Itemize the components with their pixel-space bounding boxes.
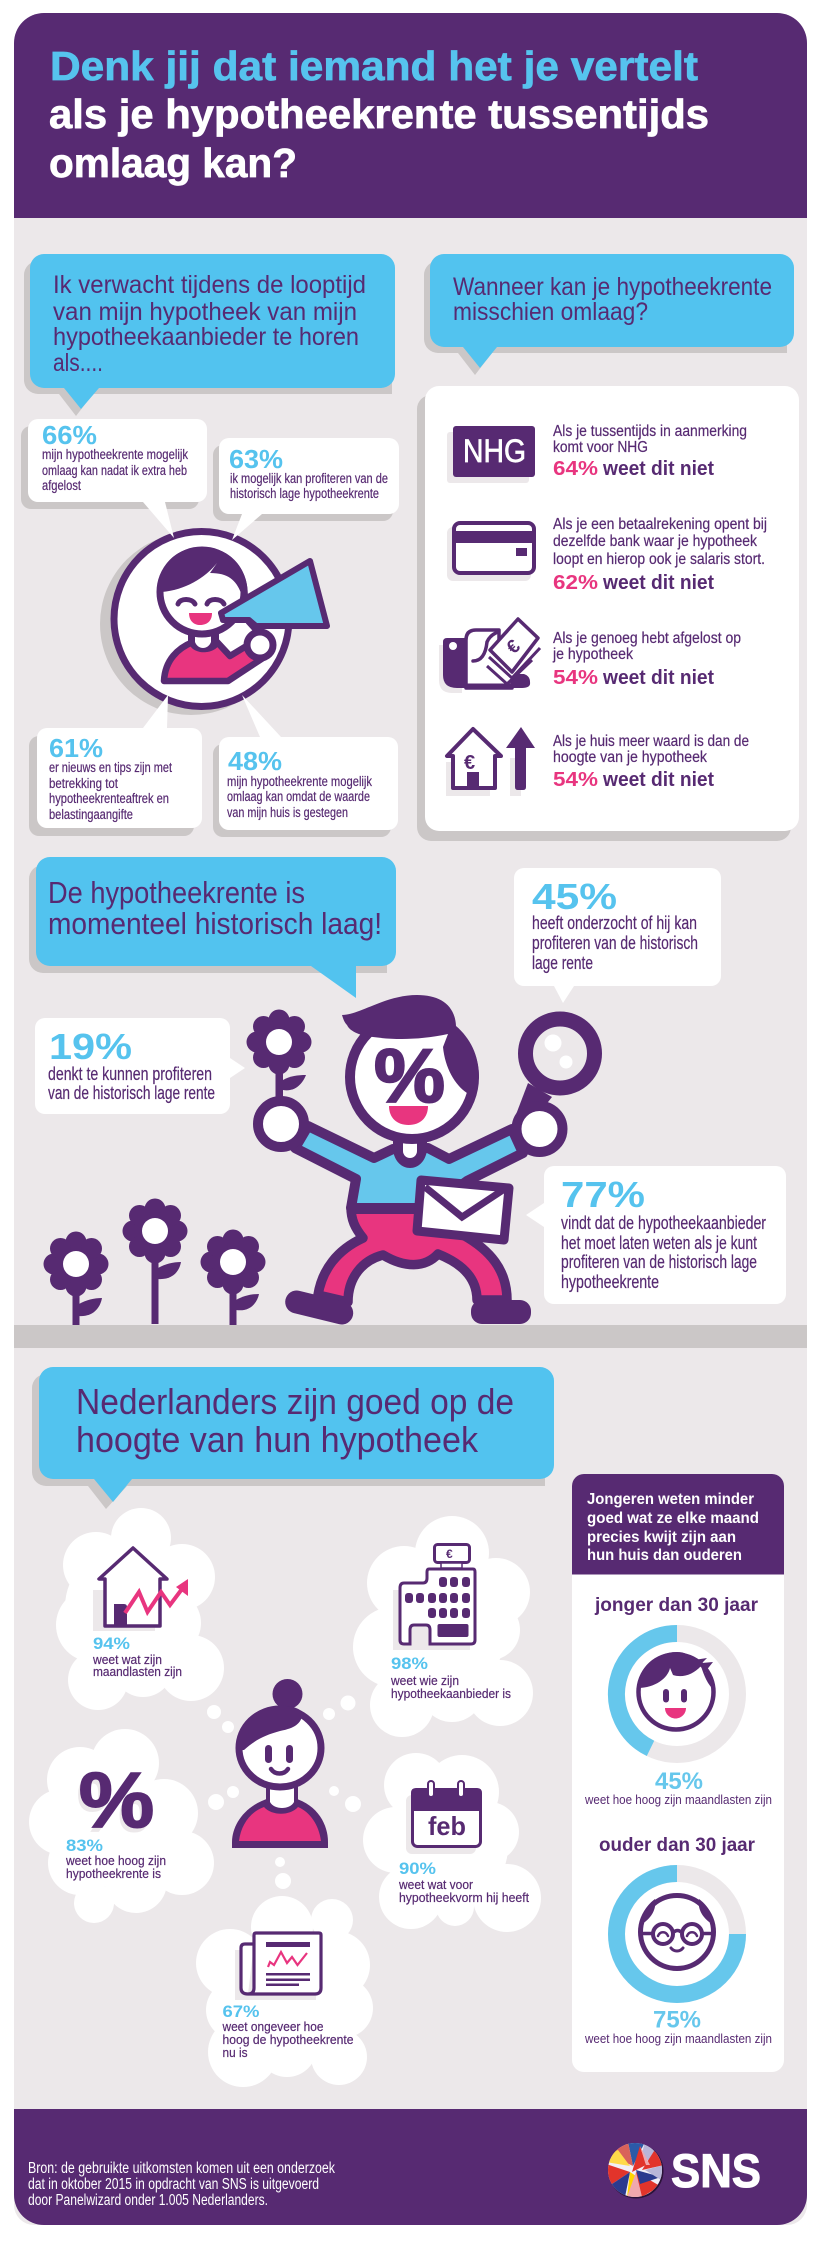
icon: percent: % — [79, 1756, 154, 1844]
callout: 66%: omlaag kan nadat ik extra heb — [42, 463, 187, 478]
eyes and mouth — [178, 600, 224, 604]
hands — [258, 1101, 304, 1147]
face — [265, 1745, 272, 1763]
item text: huis: Als je huis meer waard is dan de — [553, 733, 749, 750]
item text: betaalrekening: Als je een betaalrekening opent bij — [553, 516, 767, 533]
bubble text — [76, 1381, 514, 1460]
item text: afgelost: 54% — [553, 667, 598, 689]
callout: 77%: profiteren van de historisch lage — [561, 1252, 757, 1272]
item text: betaalrekening — [553, 516, 767, 594]
magnifier handle — [512, 1083, 552, 1125]
icon: young face — [638, 1652, 714, 1730]
source text: door Panelwizard onder 1.005 Nederlanders. — [28, 2192, 268, 2209]
mouth — [389, 1106, 428, 1125]
donut chart: 75% — [616, 1874, 738, 1994]
callout: 61%: er nieuws en tips zijn met — [49, 760, 172, 775]
panel heading: precies kwijt zijn aan — [587, 1529, 736, 1546]
speech bubble: wanneer — [424, 254, 794, 375]
cloud: 83% — [29, 1729, 214, 1923]
callout: 63% — [219, 438, 399, 540]
callout: 77% — [526, 1166, 786, 1304]
cloud: 67%: weet ongeveer hoe — [222, 2019, 324, 2034]
bubble text — [453, 273, 772, 326]
source text — [28, 2160, 335, 2209]
body — [164, 642, 266, 681]
cloud: 98%: hypotheekaanbieder is — [391, 1686, 511, 1701]
bubble text: momenteel historisch laag! — [48, 906, 382, 941]
callout: 66% — [28, 419, 207, 538]
callout: 19%: denkt te kunnen profiteren — [48, 1064, 212, 1084]
cloud: 67%: nu is — [222, 2045, 248, 2060]
title: omlaag kan? — [49, 140, 297, 186]
torso and arms — [295, 1126, 523, 1208]
item text: betaalrekening: loopt en hierop ook je salaris stort. — [553, 551, 765, 568]
stat: 45%: 45% — [655, 1768, 703, 1795]
callout: 77%: het moet laten weten als je kunt — [561, 1233, 757, 1253]
neck — [266, 1780, 298, 1811]
megaphone circle shadow — [100, 533, 282, 715]
source text: dat in oktober 2015 in opdracht van SNS is uitgevoerd — [28, 2176, 319, 2193]
callout: 48%: van mijn huis is gestegen — [227, 805, 348, 820]
icon: bank building — [393, 1544, 475, 1650]
head — [160, 550, 244, 634]
panel heading: hun huis dan ouderen — [587, 1547, 742, 1564]
callout: 48%: mijn hypotheekrente mogelijk — [227, 774, 372, 789]
percent face: % — [374, 1034, 445, 1119]
callout: 61%: belastingaangifte — [49, 807, 133, 822]
item text: afgelost: weet dit niet — [602, 667, 714, 689]
icon: calendar feb — [406, 1781, 482, 1854]
callout: 66%: 66% — [42, 420, 97, 450]
title — [49, 43, 709, 186]
icon: hand with money: € — [503, 636, 525, 659]
hand — [247, 632, 273, 658]
cloud: 94% — [56, 1508, 224, 1710]
bubble text: Ik verwacht tijdens de looptijd — [53, 271, 366, 299]
stat: 75%: weet hoe hoog zijn maandlasten zijn — [584, 2032, 772, 2046]
bun — [272, 1679, 302, 1709]
megaphone — [248, 622, 264, 633]
head — [239, 1709, 321, 1787]
body — [232, 1798, 328, 1848]
panel heading: Jongeren weten minder — [587, 1491, 754, 1508]
envelope — [417, 1180, 509, 1240]
callout: 45% — [514, 868, 721, 1003]
bubble text: Wanneer kan je hypotheekrente — [453, 273, 772, 301]
callout: 77%: vindt dat de hypotheekaanbieder — [561, 1213, 766, 1233]
item text: NHG: komt voor NHG — [553, 439, 648, 456]
callout: 61% — [37, 695, 202, 828]
item text: NHG: Als je tussentijds in aanmerking — [553, 423, 747, 440]
speech bubble: goed op de hoogte — [32, 1367, 554, 1509]
bubble text: De hypotheekrente is — [48, 875, 305, 910]
bubble text: Nederlanders zijn goed op de — [76, 1381, 514, 1422]
cloud: 67%: 67% — [222, 2002, 260, 2021]
item text: huis: 54% — [553, 769, 598, 791]
title: als je hypotheekrente tussentijds — [49, 91, 709, 137]
cloud: 94%: weet wat zijn — [92, 1652, 162, 1667]
feet — [297, 1302, 342, 1313]
callout: 61%: hypotheekrenteaftrek en — [49, 791, 169, 806]
icon: percent: % — [76, 1761, 151, 1849]
cloud: 98%: 98% — [391, 1654, 428, 1673]
callout: 45%: lage rente — [532, 953, 593, 973]
cloud: 67%: hoog de hypotheekrente — [222, 2032, 354, 2047]
icon: bank card — [447, 523, 534, 581]
bubble text — [48, 875, 382, 941]
flower held by character — [246, 1010, 312, 1100]
bubble text: misschien omlaag? — [453, 298, 648, 326]
callout: 77%: 77% — [561, 1174, 645, 1215]
bubble text: als.... — [53, 349, 103, 377]
title: Denk jij dat iemand het je vertelt — [50, 43, 698, 89]
character: thinking woman — [232, 1679, 328, 1848]
callout: 77%: hypotheekrente — [561, 1272, 659, 1292]
panel: wanneer omlaag — [417, 386, 799, 841]
callout: 48%: 48% — [228, 746, 282, 776]
icon: house with arrow: € — [464, 752, 475, 774]
logo: SNS — [605, 2140, 761, 2200]
panel heading — [587, 1491, 759, 1564]
stat: 75% — [584, 2006, 772, 2046]
cloud: 90%: 90% — [399, 1859, 436, 1878]
bubble text: van mijn hypotheek van mijn — [53, 298, 357, 326]
item text: afgelost — [552, 630, 741, 689]
cloud: 83%: weet hoe hoog zijn — [65, 1853, 166, 1868]
callout: 45%: heeft onderzocht of hij kan — [532, 913, 697, 933]
neck — [393, 1130, 427, 1168]
item text: huis: weet dit niet — [602, 769, 714, 791]
cloud: 98%: weet wie zijn — [390, 1673, 459, 1688]
icon: calendar feb: feb — [428, 1811, 466, 1841]
speech bubble: verwachting — [24, 254, 395, 416]
hair — [236, 1706, 303, 1750]
icon: newspaper — [235, 1933, 321, 2000]
item text: betaalrekening: dezelfde bank waar je hypotheek — [553, 533, 757, 550]
callout: 66%: afgelost — [42, 478, 81, 493]
icon: megaphone person — [114, 532, 327, 706]
donut chart: 45% — [616, 1634, 738, 1754]
panel heading: goed wat ze elke maand — [587, 1510, 759, 1527]
source text: Bron: de gebruikte uitkomsten komen uit een onderzoek — [28, 2160, 335, 2177]
callout: 48%: omlaag kan omdat de waarde — [227, 789, 370, 804]
icon: old face — [640, 1896, 714, 1968]
hair — [159, 547, 248, 596]
bubble text — [53, 271, 366, 377]
callout: 63%: historisch lage hypotheekrente — [230, 486, 379, 501]
thought dots — [207, 1696, 361, 1889]
stat: 45% — [584, 1768, 772, 1807]
callout: 45%: profiteren van de historisch — [532, 933, 698, 953]
speech bubble: historisch laag — [29, 857, 396, 998]
item text: betaalrekening: weet dit niet — [602, 572, 714, 594]
bubble text: hoogte van hun hypotheek — [76, 1419, 479, 1460]
cloud: 90% — [363, 1753, 541, 1932]
panel: jongeren — [572, 1474, 784, 2072]
item text: afgelost: je hypotheek — [552, 646, 633, 663]
item text: afgelost: Als je genoeg hebt afgelost op — [553, 630, 741, 647]
item text: huis — [553, 733, 749, 791]
cloud: 94%: 94% — [93, 1634, 130, 1653]
callout: 19%: 19% — [49, 1026, 132, 1067]
cloud: 98% — [353, 1516, 533, 1737]
item text: huis: hoogte van je hypotheek — [553, 749, 707, 766]
cloud: 94%: maandlasten zijn — [93, 1664, 182, 1679]
grey divider band — [14, 1325, 807, 1348]
callout: 63%: 63% — [229, 444, 283, 474]
callout: 48% — [219, 695, 398, 830]
icon: house with rising line — [93, 1548, 188, 1631]
belt — [347, 1203, 437, 1214]
subheading: jonger dan 30 jaar — [594, 1595, 759, 1616]
callout: 45%: 45% — [532, 876, 617, 917]
head — [350, 1015, 474, 1139]
flowers on ground — [44, 1198, 266, 1326]
icon: NHG — [447, 426, 535, 483]
hair — [342, 995, 479, 1093]
cloud: 83%: hypotheekrente is — [66, 1866, 161, 1881]
legs — [318, 1207, 507, 1302]
callout: 19% — [35, 1018, 245, 1114]
cloud: 90%: hypotheekvorm hij heeft — [399, 1890, 529, 1905]
icon: bank building: € — [446, 1547, 453, 1561]
callout: 63%: ik mogelijk kan profiteren van de — [230, 471, 388, 486]
cloud: 83%: 83% — [66, 1836, 103, 1855]
callout: 61%: betrekking tot — [49, 776, 118, 791]
callout: 66%: mijn hypotheekrente mogelijk — [42, 447, 188, 462]
magnifier — [526, 1019, 594, 1088]
footer band — [14, 2109, 807, 2225]
item text: betaalrekening: 62% — [553, 572, 598, 594]
stat: 75%: 75% — [653, 2006, 701, 2034]
icon: house with arrow — [446, 727, 535, 796]
icon: NHG: NHG — [463, 433, 526, 469]
callout: 19%: van de historisch lage rente — [48, 1083, 215, 1103]
subheading: ouder dan 30 jaar — [599, 1835, 756, 1856]
item text: NHG — [553, 423, 747, 480]
callout shadows — [21, 426, 393, 837]
icon: hand with money — [439, 619, 540, 693]
cloud: 67% — [196, 1896, 373, 2087]
bubble text: hypotheekaanbieder te horen — [53, 323, 359, 351]
item text: NHG: 64% — [553, 458, 598, 480]
callout: 61%: 61% — [49, 733, 103, 763]
header band — [14, 13, 807, 218]
logo: SNS: SNS — [671, 2144, 761, 2197]
cloud: 90%: weet wat voor — [398, 1877, 474, 1892]
character with percent face — [258, 995, 594, 1324]
item text: NHG: weet dit niet — [602, 458, 714, 480]
stat: 45%: weet hoe hoog zijn maandlasten zijn — [584, 1793, 772, 1807]
